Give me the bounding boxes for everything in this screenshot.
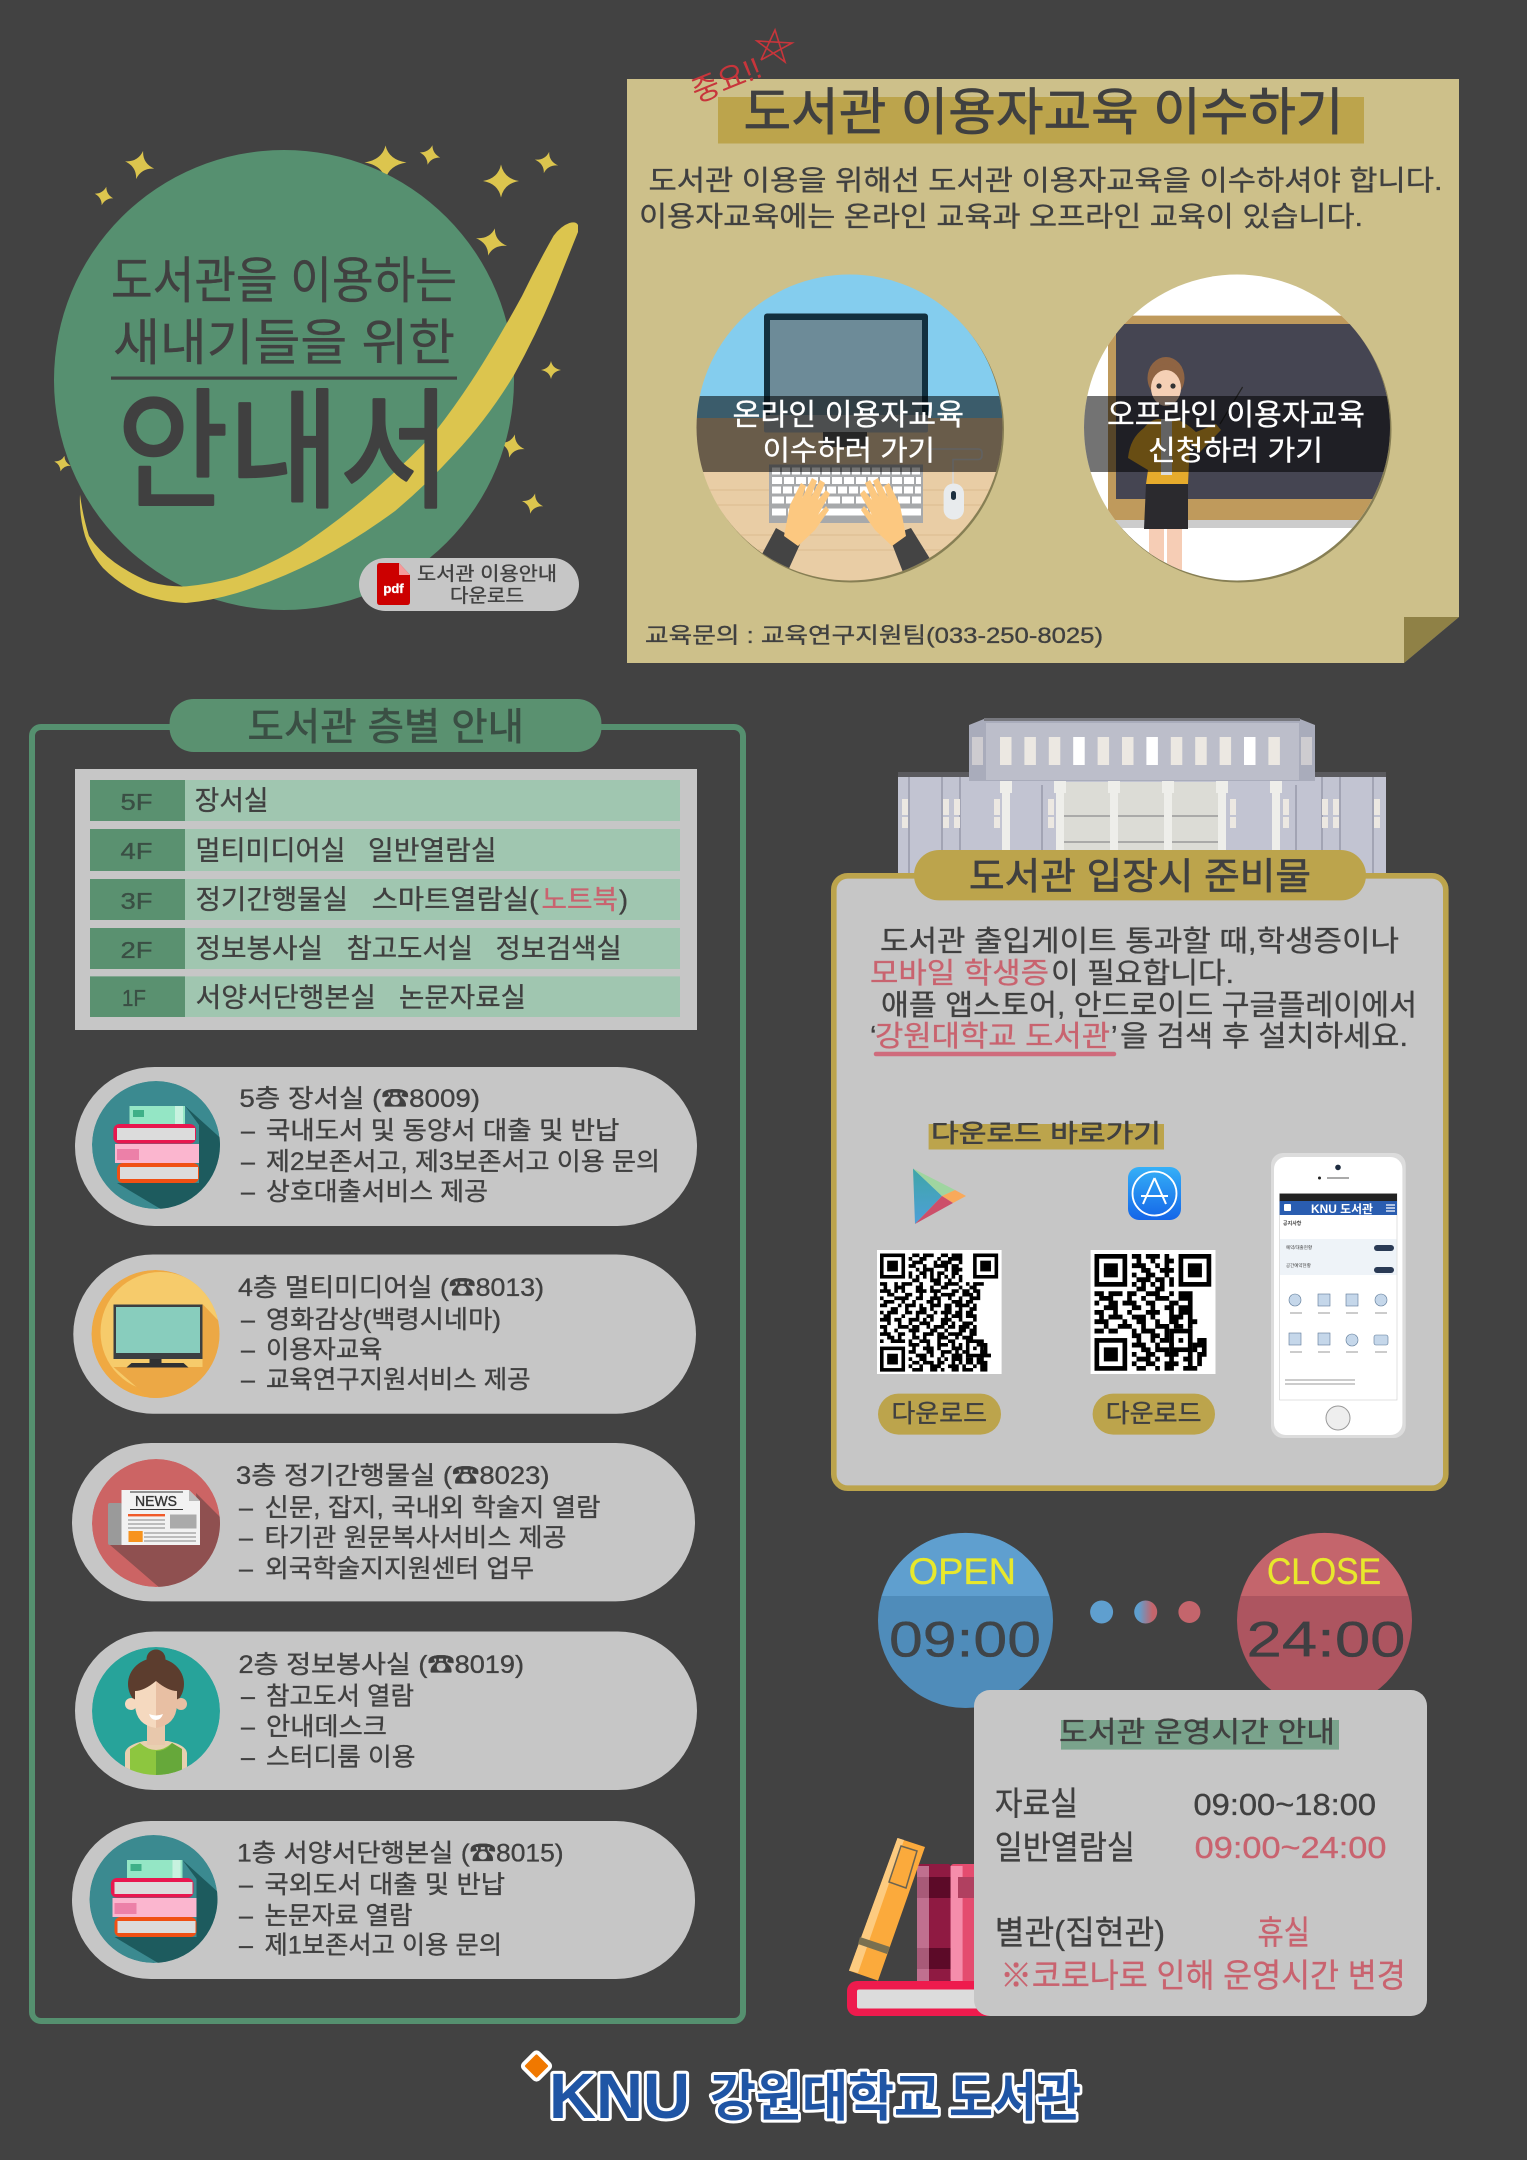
- row: 4F: [90, 829, 680, 871]
- floor card: 1F western books: 1층 서양서단행본실 (☎8015): [237, 1840, 564, 1868]
- panel: user education note: 이용자교육에는 온라인 교육과 오프라인 교육이 있습니다.: [639, 201, 1363, 232]
- icon: app store: [1128, 1167, 1181, 1220]
- floor card: 5F archive: 5층 장서실 (☎8009): [239, 1085, 480, 1113]
- icon: pdf file: [377, 563, 410, 605]
- open hours badge: 09:00: [889, 1612, 1041, 1668]
- QR code: iOS: [1091, 1250, 1216, 1374]
- monitor: [764, 314, 928, 416]
- button: download iOS: 다운로드: [1106, 1400, 1202, 1428]
- floor card: 3F periodicals: –: [239, 1555, 253, 1583]
- offline education circle: 오프라인 이용자교육: [1107, 399, 1365, 432]
- floor card: 5F archive: –: [241, 1117, 255, 1145]
- panel: user education note: [627, 30, 1459, 663]
- floor card: 1F western books: 국외도서 대출 및 반납: [264, 1871, 505, 1899]
- heading: 도서관 이용자교육 이수하기: [744, 84, 1344, 141]
- online education circle: [696, 274, 1006, 583]
- floor card: 2F reference: [75, 1632, 697, 1790]
- row: reading room: 일반열람실: [995, 1829, 1135, 1866]
- row: 3F: 노트북: [542, 885, 618, 915]
- heading pill: 도서관 층별 안내: [248, 707, 524, 749]
- sleeves: [762, 528, 800, 568]
- phone app name: KNU 도서관: [1311, 1203, 1373, 1216]
- logo wordmark: 도서관: [949, 2070, 1081, 2128]
- handwritten note: important: [687, 30, 792, 109]
- floor card: 4F multimedia: 교육연구지원서비스 제공: [266, 1366, 531, 1394]
- row: 3F: 스마트열람실(: [372, 885, 539, 915]
- instruction text: 도서관 출입게이트 통과할 때,학생증이나: [880, 925, 1399, 958]
- floor card: 3F periodicals: 외국학술지지원센터 업무: [265, 1555, 534, 1583]
- floor card: 1F western books: 제1보존서고 이용 문의: [264, 1932, 502, 1960]
- logo wordmark: KNU: [549, 2060, 690, 2132]
- instruction text: ’: [1111, 1021, 1117, 1053]
- panel: floor guide: [32, 699, 743, 2021]
- floor card: 4F multimedia: [73, 1254, 696, 1414]
- floor card: 3F periodicals: –: [239, 1524, 253, 1552]
- floor card: 4F multimedia: –: [241, 1336, 255, 1364]
- pdf download pill: 도서관 이용안내: [417, 563, 557, 585]
- icon: books illustration: [847, 1838, 997, 2016]
- row: annex: 별관(집현관): [995, 1914, 1165, 1951]
- button: download iOS: [1093, 1394, 1215, 1435]
- row: archive room: [995, 1785, 1376, 1822]
- floor card: 4F multimedia: –: [241, 1366, 255, 1394]
- open hours badge: [878, 1533, 1053, 1708]
- floor card: 2F reference: 참고도서 열람: [266, 1682, 414, 1710]
- dark caption band: [696, 396, 1006, 472]
- floor card: 1F western books: –: [239, 1932, 253, 1960]
- offline education circle: 신청하러 가기: [1148, 435, 1323, 466]
- handwritten note: important: 중요!!: [687, 52, 766, 109]
- pdf download pill: [359, 558, 579, 611]
- floor card: 3F periodicals: 신문, 잡지, 국내외 학술지 열람: [264, 1494, 600, 1522]
- floor card: 4F multimedia: 영화감상(백령시네마): [266, 1306, 501, 1334]
- note fold: [1404, 617, 1459, 663]
- online education circle: 온라인 이용자교육: [732, 399, 964, 432]
- heading pill: [914, 850, 1366, 900]
- row: reading room: [995, 1829, 1386, 1866]
- panel: entry requirements: [834, 850, 1446, 1488]
- row: 2F: 참고도서실: [347, 934, 473, 964]
- online education circle: 이수하러 가기: [763, 435, 935, 466]
- title text: 도서관을 이용하는: [111, 253, 457, 309]
- row: 1F: [90, 976, 680, 1017]
- pdf download pill: 다운로드: [450, 585, 524, 607]
- logo wordmark: 강원대학교: [710, 2070, 940, 2128]
- floor card: 5F archive: 상호대출서비스 제공: [266, 1178, 488, 1206]
- floor card: 3F periodicals: 타기관 원문복사서비스 제공: [264, 1524, 566, 1552]
- floor card: 1F western books: –: [239, 1871, 253, 1899]
- mouse cable: [927, 449, 982, 484]
- floor card: 1F western books: [72, 1821, 695, 1979]
- blackboard: [1108, 316, 1390, 520]
- icon: television: [92, 1270, 226, 1404]
- row: 3F: ): [619, 885, 628, 915]
- phone mockup: 공간예약현황: [1286, 1262, 1311, 1269]
- floor table: [75, 769, 697, 1030]
- floor card: 2F reference: 안내데스크: [266, 1713, 387, 1741]
- icon: newspaper: NEWS: [135, 1494, 177, 1510]
- gold ring: [80, 222, 578, 603]
- row: archive room: 자료실: [995, 1785, 1078, 1822]
- logo: KNU library: [522, 2051, 1081, 2132]
- mouse: [944, 484, 964, 520]
- instruction text: ‘: [870, 1021, 876, 1053]
- row: archive room: 09:00~18:00: [1194, 1787, 1376, 1822]
- notice: ※코로나로 인해 운영시간 변경: [1000, 1957, 1406, 1994]
- close hours badge: [1237, 1533, 1412, 1708]
- teacher: [1128, 357, 1243, 577]
- floor card: 2F reference: –: [241, 1682, 255, 1710]
- planet circle: [54, 150, 514, 610]
- row: 5F: 장서실: [195, 786, 269, 816]
- floor card: 2F reference: 2층 정보봉사실 (☎8019): [238, 1651, 524, 1679]
- floor card: 1F western books: 논문자료 열람: [264, 1902, 412, 1930]
- floor card: 4F multimedia: 4층 멀티미디어실 (☎8013): [238, 1274, 544, 1302]
- icon: librarian: [92, 1647, 220, 1775]
- row: 5F: [90, 780, 680, 821]
- button: download android: [878, 1394, 1001, 1435]
- row: annex: 휴실: [1258, 1914, 1310, 1951]
- row: 3F: 정기간행물실: [196, 885, 348, 915]
- row: 3F: [90, 879, 680, 920]
- icon: gold stars: [52, 143, 561, 516]
- icon: newspaper: [92, 1459, 226, 1593]
- phone mockup: 공지사항: [1283, 1220, 1302, 1227]
- floor card: 5F archive: 국내도서 및 동양서 대출 및 반납: [266, 1117, 619, 1145]
- row: 4F: 4F: [120, 838, 152, 864]
- instruction text: 이 필요합니다.: [1051, 958, 1234, 990]
- floor card: 5F archive: –: [241, 1178, 255, 1206]
- icon: stack of books: [90, 1835, 224, 1969]
- floor card: 5F archive: 제2보존서고, 제3보존서고 이용 문의: [266, 1148, 660, 1176]
- row: reading room: 09:00~24:00: [1195, 1830, 1386, 1865]
- close hours badge: 24:00: [1246, 1612, 1406, 1668]
- floor card: 3F periodicals: [72, 1443, 695, 1601]
- button: download android: 다운로드: [891, 1400, 987, 1428]
- row: 2F: 2F: [120, 937, 152, 963]
- floor card: 5F archive: [75, 1067, 697, 1226]
- floor card: 2F reference: –: [241, 1744, 255, 1772]
- icon: pdf file: pdf: [383, 581, 404, 596]
- floor card: 2F reference: –: [241, 1713, 255, 1741]
- panel: opening hours: [974, 1690, 1427, 2016]
- row: 2F: [90, 928, 680, 969]
- instruction text: 을 검색 후 설치하세요.: [1120, 1020, 1408, 1053]
- floor card: 5F archive: –: [241, 1148, 255, 1176]
- row: 1F: 서양서단행본실: [196, 983, 376, 1013]
- contact text: 교육문의 : 교육연구지원팀(033-250-8025): [645, 623, 1103, 648]
- row: annex: [995, 1914, 1310, 1951]
- floor card: 4F multimedia: –: [241, 1306, 255, 1334]
- instruction text: [870, 925, 1417, 1054]
- intro text: 도서관 이용을 위해선 도서관 이용자교육을 이수하셔야 합니다.: [648, 165, 1442, 196]
- instruction text: 애플 앱스토어, 안드로이드 구글플레이에서: [881, 990, 1417, 1022]
- keyboard: [769, 464, 923, 523]
- open hours badge: OPEN: [909, 1551, 1016, 1592]
- row: 4F: 멀티미디어실: [196, 836, 346, 866]
- logo mark: [522, 2051, 551, 2081]
- floor card: 2F reference: 스터디룸 이용: [266, 1744, 416, 1772]
- heading pill: 도서관 입장시 준비물: [969, 856, 1311, 897]
- heading: 도서관 운영시간 안내: [1059, 1717, 1335, 1749]
- phone mockup: 예약/대출현황: [1286, 1244, 1312, 1251]
- row: 3F: 3F: [120, 888, 152, 914]
- floor card: 1F western books: –: [239, 1902, 253, 1930]
- icon: google play: [913, 1168, 966, 1224]
- hero: planet title: [52, 143, 578, 610]
- logo wordmark: [549, 2060, 1081, 2132]
- instruction text: 강원대학교 도서관: [875, 1020, 1110, 1053]
- icon: stack of books: [92, 1081, 226, 1215]
- heading pill: [170, 699, 601, 752]
- QR code: android: [877, 1250, 1002, 1374]
- row: 2F: 정보봉사실: [196, 934, 323, 964]
- dark caption band: [1084, 396, 1390, 472]
- connector dots: [1090, 1600, 1200, 1624]
- floor card: 3F periodicals: –: [239, 1494, 253, 1522]
- floor card: 3F periodicals: 3층 정기간행물실 (☎8023): [236, 1462, 550, 1490]
- row: 2F: 정보검색실: [496, 934, 622, 964]
- close hours badge: CLOSE: [1267, 1551, 1381, 1592]
- floor card: 4F multimedia: 이용자교육: [266, 1336, 382, 1364]
- download shortcut label: 다운로드 바로가기: [931, 1120, 1161, 1148]
- offline education circle: [1084, 274, 1392, 582]
- hero: planet title: 새내기들을 위한: [113, 315, 455, 371]
- phone mockup: [1271, 1153, 1406, 1438]
- row: 5F: 5F: [120, 789, 152, 815]
- instruction text: 모바일 학생증: [870, 957, 1049, 990]
- row: 1F: 논문자료실: [399, 983, 526, 1013]
- row: 1F: 1F: [122, 985, 146, 1011]
- hands: [784, 478, 830, 546]
- row: 4F: 일반열람실: [368, 836, 497, 866]
- hero: planet title: 안내서: [117, 379, 451, 525]
- icon: library building: [898, 718, 1386, 876]
